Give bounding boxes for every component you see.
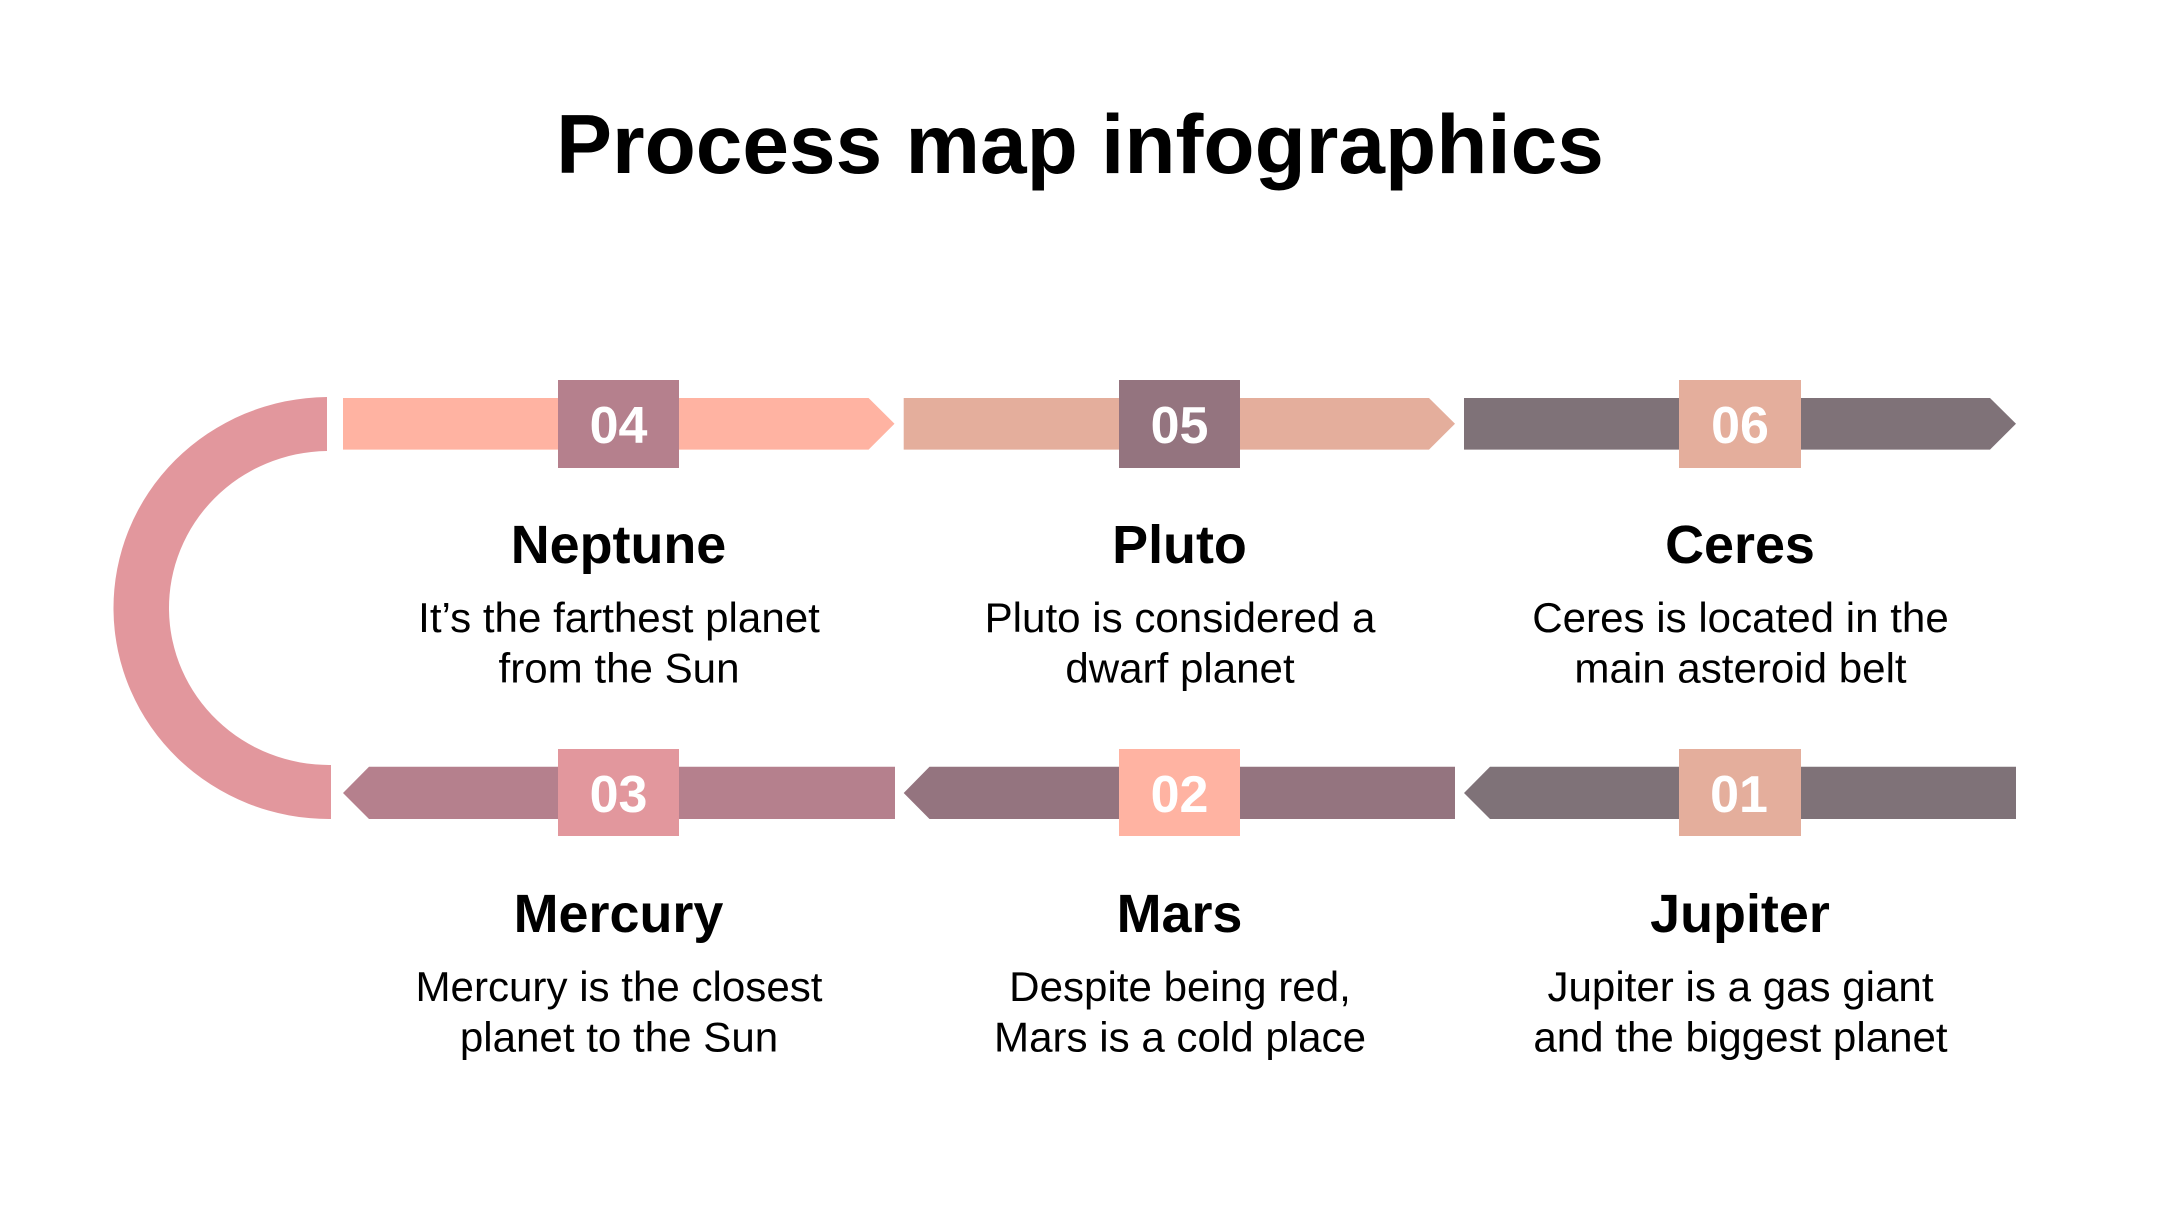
step 06: Ceres: [1464, 380, 2016, 692]
heading Mars: Mars: [1117, 884, 1242, 944]
arrow 01: [1464, 767, 2016, 819]
number badge 04: [558, 380, 679, 468]
number badge 06: [1679, 380, 1801, 468]
number badge 05: 05: [1151, 397, 1208, 455]
number badge 04: 04: [590, 397, 647, 455]
number badge 02: 02: [1151, 766, 1208, 824]
text Ceres: [1532, 594, 1949, 692]
number badge 02: [1119, 749, 1240, 836]
text Jupiter: [1533, 963, 1948, 1060]
text Mars: Mars is a cold place: [994, 1014, 1366, 1060]
text Pluto: Pluto is considered a: [985, 594, 1376, 641]
heading Ceres: Ceres: [1665, 515, 1815, 575]
text Neptune: [418, 594, 820, 692]
heading Pluto: Pluto: [1112, 515, 1247, 575]
text Neptune: It’s the farthest planet: [418, 594, 820, 641]
arrow 02: [904, 767, 1455, 819]
arrow 04: [343, 398, 894, 450]
text Ceres: main asteroid belt: [1574, 644, 1907, 692]
number badge 01: [1679, 749, 1801, 836]
text Mars: [994, 963, 1366, 1060]
number badge 05: [1119, 380, 1240, 468]
number badge 01: 01: [1710, 766, 1768, 824]
title: Process map infographics: [556, 97, 1604, 191]
step 01: Jupiter: [1464, 749, 2016, 1060]
number badge 03: [558, 749, 679, 836]
text Neptune: from the Sun: [498, 644, 740, 692]
connector arc: [113, 397, 331, 819]
heading Mercury: Mercury: [514, 884, 723, 944]
arrow 03: [343, 767, 895, 819]
step 03: Mercury: [343, 749, 895, 1060]
number badge 06: 06: [1711, 397, 1769, 455]
text Pluto: [985, 594, 1376, 692]
heading Neptune: Neptune: [511, 515, 726, 575]
text Pluto: dwarf planet: [1065, 644, 1295, 692]
text Mercury: [415, 963, 823, 1060]
number badge 03: 03: [590, 766, 647, 824]
arrow 06: [1464, 398, 2016, 450]
text Ceres: Ceres is located in the: [1532, 594, 1949, 641]
text Mars: Despite being red,: [1009, 963, 1351, 1010]
text Mercury: Mercury is the closest: [415, 963, 823, 1010]
step 05: Pluto: [904, 380, 1455, 692]
text Jupiter: and the biggest planet: [1533, 1014, 1948, 1060]
text Mercury: planet to the Sun: [460, 1014, 778, 1060]
step 02: Mars: [904, 749, 1455, 1060]
heading Jupiter: Jupiter: [1650, 884, 1830, 944]
arrow 05: [904, 398, 1455, 450]
step 04: Neptune: [343, 380, 894, 692]
text Jupiter: Jupiter is a gas giant: [1547, 963, 1934, 1010]
